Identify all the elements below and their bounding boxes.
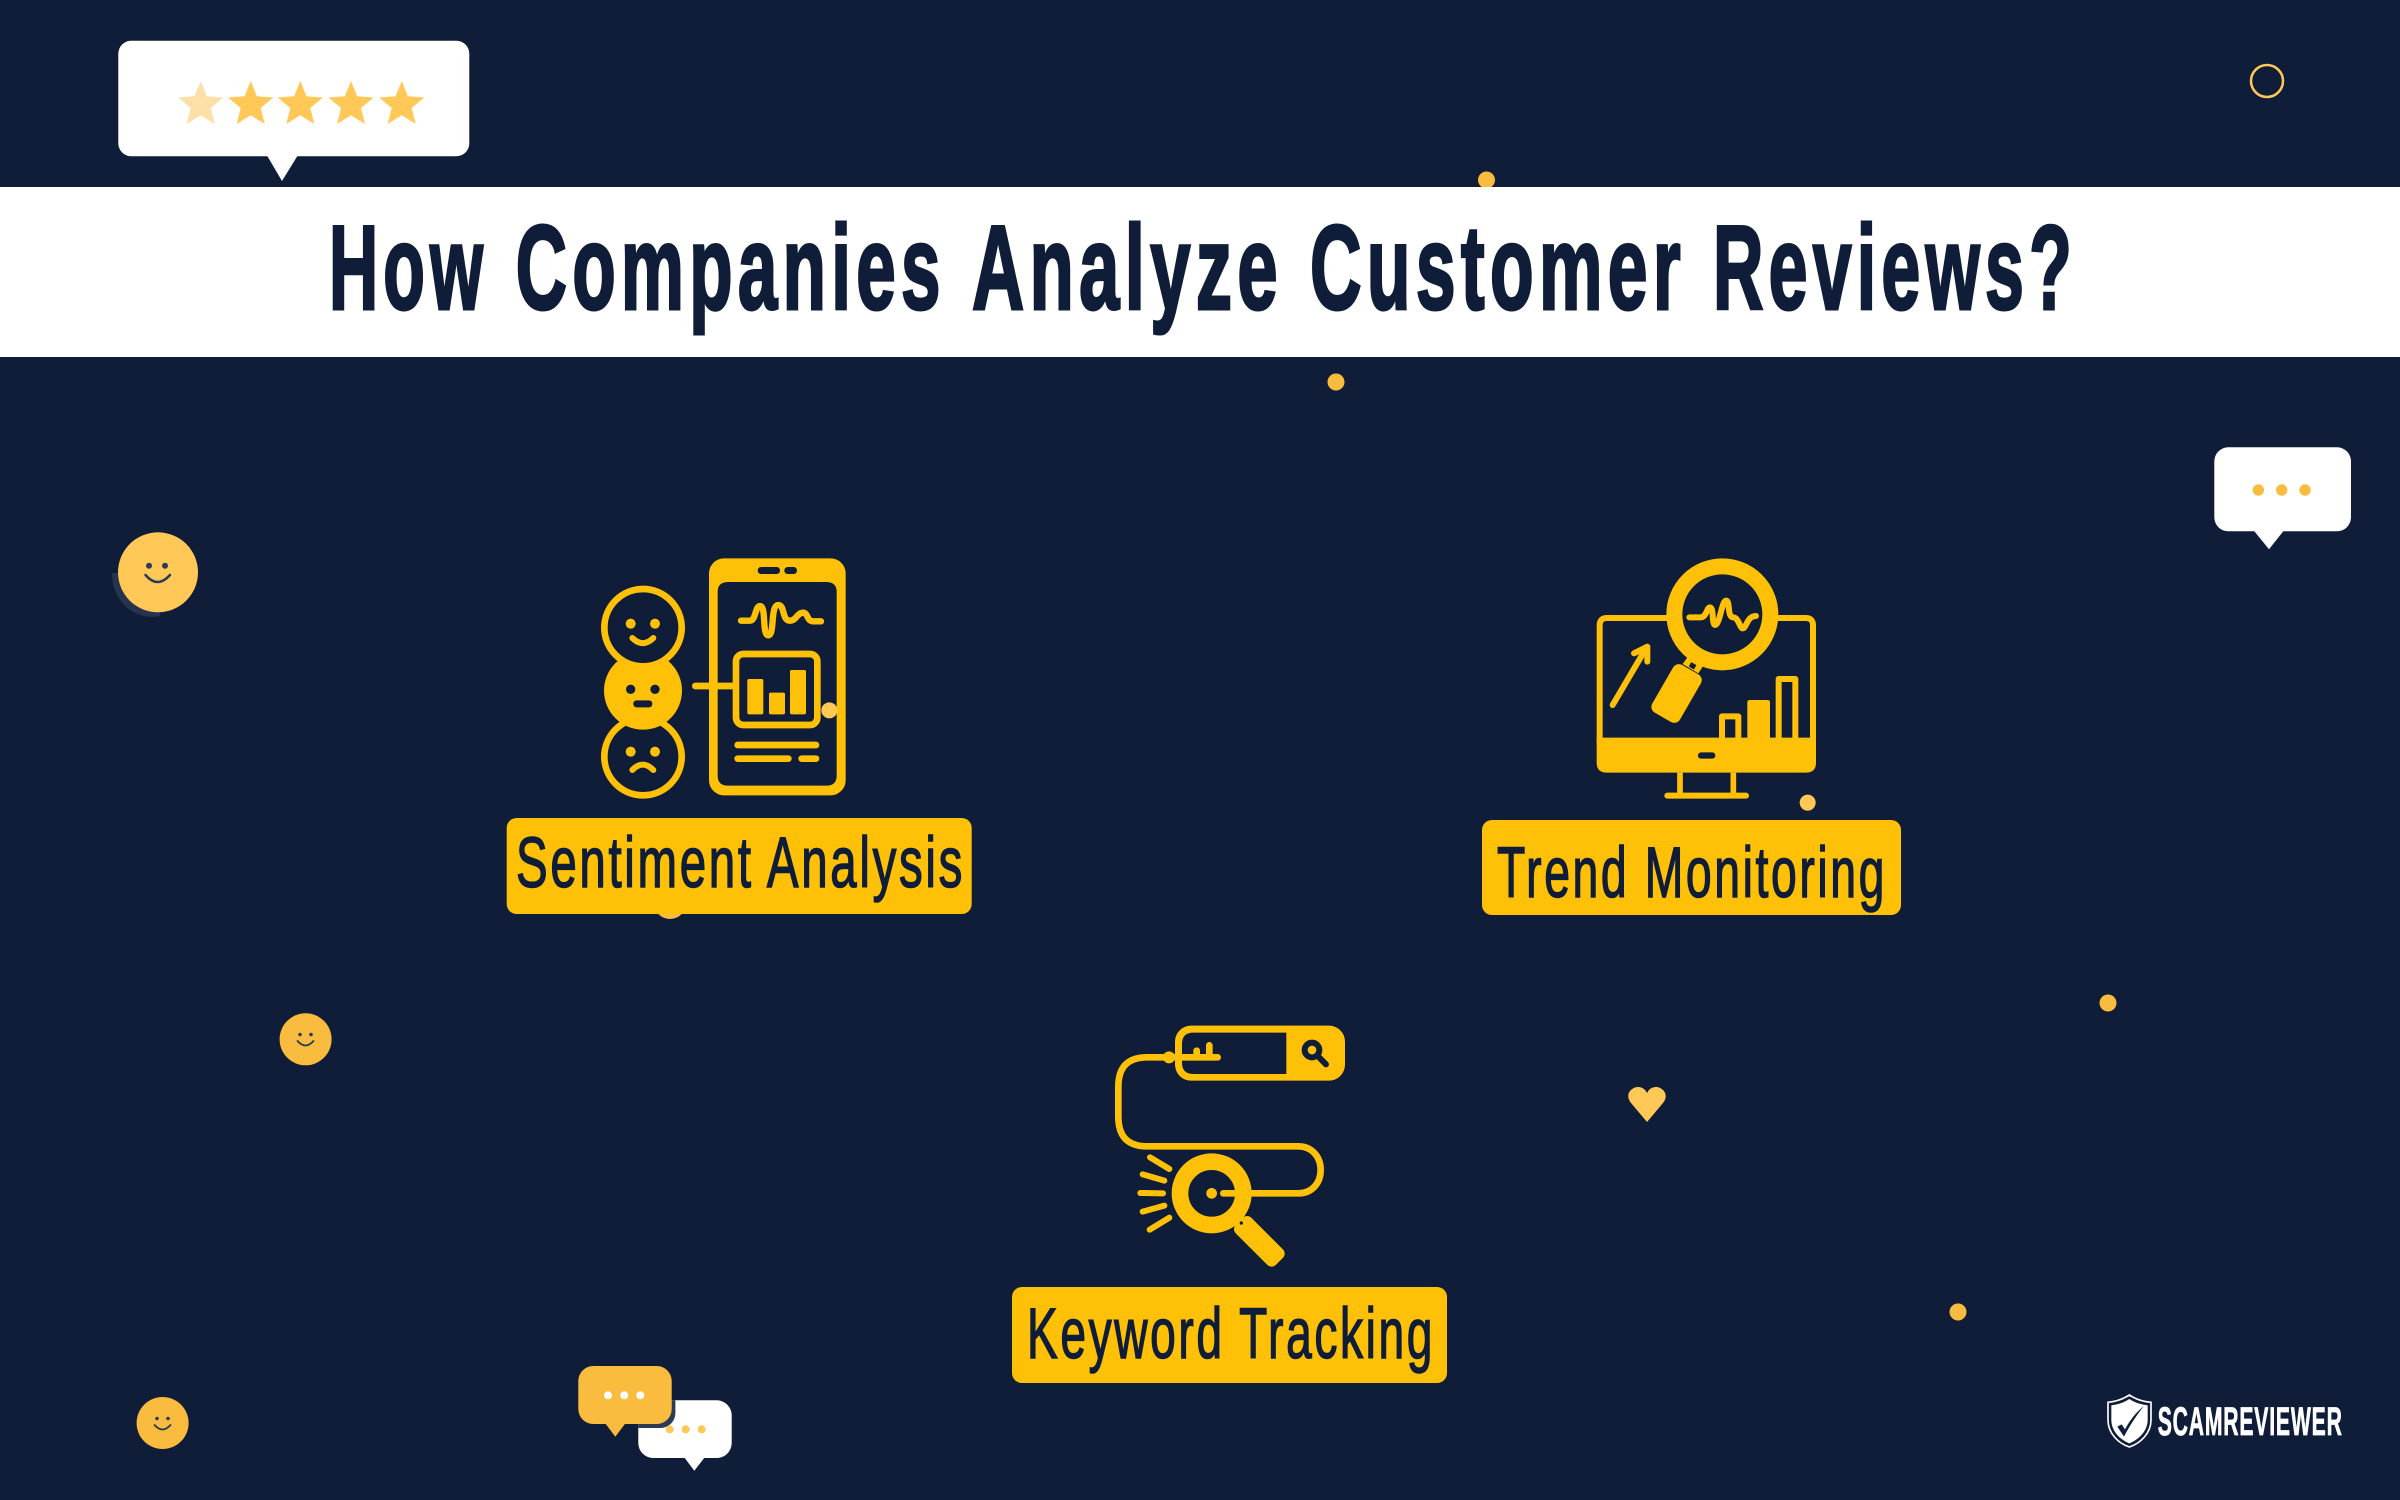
title: Companies — [516, 201, 946, 335]
emoji: sad face — [604, 718, 682, 795]
emoji: bottom left smiley — [137, 1397, 189, 1449]
stars — [178, 81, 424, 124]
decorative ring — [2251, 65, 2283, 97]
emoji: neutral face — [604, 652, 682, 730]
overlapping chat bubbles — [578, 1366, 732, 1471]
icon: keyword tracking (search bar and magnifier) — [1118, 1026, 1345, 1269]
rating speech bubble with stars — [118, 41, 469, 181]
orange bubble — [578, 1366, 672, 1437]
label: sentiment analysis: Sentiment Analysis — [516, 824, 965, 903]
cable — [1118, 1057, 1321, 1193]
icon: shield — [2108, 1395, 2151, 1447]
bars — [1722, 679, 1795, 740]
speech bubble: top right — [2214, 447, 2351, 549]
logo: scamreviewer — [2108, 1395, 2343, 1447]
icon: trend monitoring (monitor and magnifier) — [1597, 566, 1816, 811]
magnifier — [1649, 566, 1770, 725]
emoji: medium smiley — [280, 1013, 332, 1065]
magnifier — [1180, 1162, 1287, 1269]
decorative dots — [654, 374, 2116, 1320]
label: keyword tracking: Keyword Tracking — [1027, 1295, 1435, 1374]
title band — [0, 187, 2400, 357]
white bubble — [638, 1400, 732, 1471]
label: trend monitoring — [1482, 820, 1901, 915]
decorative dot behind title band — [1478, 172, 1495, 188]
rays — [1140, 1157, 1169, 1230]
label: sentiment analysis — [507, 818, 972, 914]
emoji: happy face — [604, 589, 682, 666]
title: Analyze — [972, 201, 1283, 335]
monitor — [1597, 618, 1816, 796]
search bar — [1163, 1026, 1345, 1081]
icon: sentiment analysis (emojis and phone) — [604, 558, 846, 795]
title — [329, 201, 2077, 335]
label: keyword tracking — [1012, 1287, 1447, 1383]
title: Reviews? — [1713, 201, 2077, 335]
emoji: large smiley — [112, 532, 198, 617]
title: Customer — [1310, 201, 1686, 335]
label: trend monitoring: Trend Monitoring — [1497, 834, 1887, 913]
rising arrow — [1613, 647, 1647, 705]
title: How — [329, 201, 488, 335]
icon: heart — [1628, 1087, 1666, 1122]
phone — [695, 558, 846, 795]
